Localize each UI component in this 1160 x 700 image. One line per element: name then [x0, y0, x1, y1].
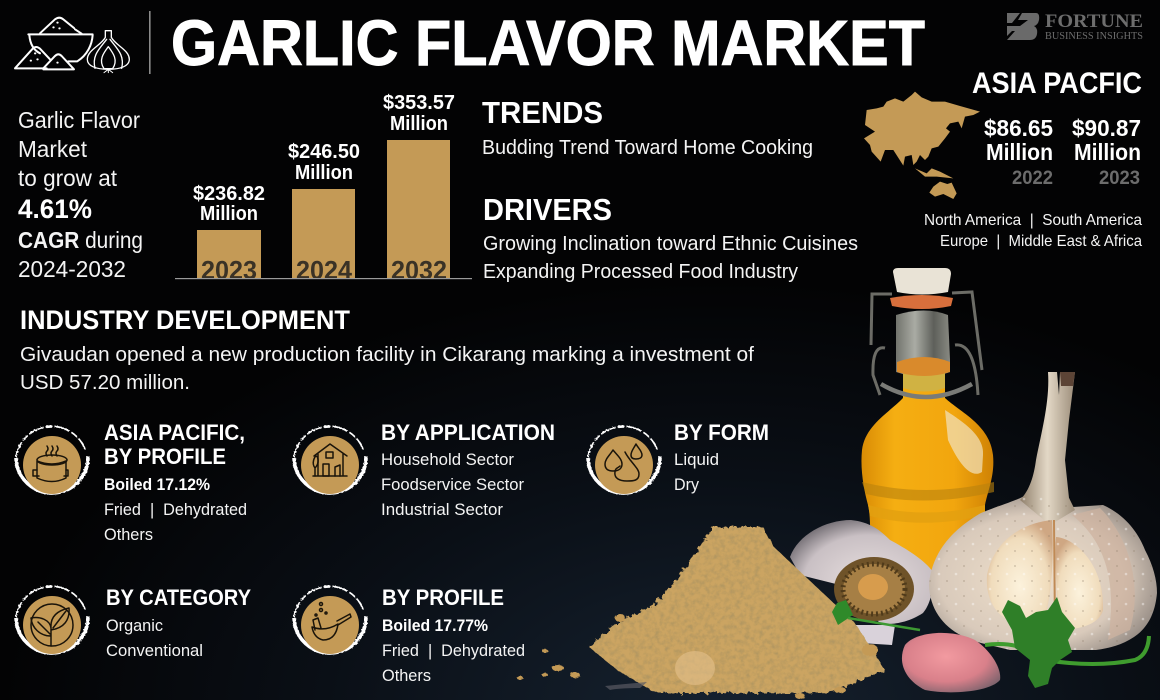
logo: Fortune Business Insights: FORTUNE: [1045, 11, 1143, 32]
other regions: Europe | Middle East & Africa: [940, 233, 1142, 250]
header divider: [149, 11, 151, 74]
regional values: [984, 115, 1141, 189]
drivers: Expanding Processed Food Industry: [483, 261, 798, 283]
icon: house: [313, 444, 347, 476]
text: CAGR summary: 4.61%: [18, 194, 92, 224]
segment: by application: Household Sector: [381, 450, 514, 469]
text: CAGR summary: CAGR during: [18, 227, 143, 253]
bar chart: market size: Million: [295, 162, 353, 184]
logo: Fortune Business Insights: BUSINESS INSIGHTS: [1045, 31, 1143, 42]
trends: [482, 95, 813, 159]
photo: cilantro: [832, 597, 1149, 688]
text: CAGR summary: 2024-2032: [18, 256, 126, 282]
text: CAGR summary: Garlic Flavor: [18, 107, 140, 133]
segment: by profile: [294, 585, 525, 685]
segment: by profile: BY PROFILE: [382, 585, 504, 610]
segment: by category: Organic: [106, 616, 163, 635]
industry development: INDUSTRY DEVELOPMENT: [20, 305, 350, 335]
segment: Asia Pacific by profile: Fried | Dehydrated: [104, 500, 247, 519]
bar chart: market size: Million: [390, 113, 448, 135]
segment: Asia Pacific by profile: ASIA PACIFIC,: [104, 420, 245, 445]
bar chart: market size: 2023: [201, 255, 257, 285]
segment: by category: [16, 585, 251, 660]
bar chart: market size: 2024: [296, 255, 353, 285]
segment: by category: BY CATEGORY: [106, 585, 251, 610]
segment: Asia Pacific by profile: [16, 420, 247, 544]
drivers: Growing Inclination toward Ethnic Cuisines: [483, 233, 858, 255]
segment: by application: [294, 420, 555, 519]
trends: TRENDS: [482, 95, 603, 130]
segment: Asia Pacific by profile: Boiled 17.12%: [104, 475, 210, 494]
segment: Asia Pacific by profile: Others: [104, 525, 153, 544]
segment: by form: [588, 420, 769, 494]
segment: by application: BY APPLICATION: [381, 420, 555, 445]
segment: by form: Dry: [674, 475, 699, 494]
other regions: [924, 212, 1142, 250]
segment: by application: Foodservice Sector: [381, 475, 524, 494]
bar chart: market size: 2032: [391, 255, 447, 285]
industry development: [20, 305, 754, 394]
bar chart: market size: [175, 92, 472, 285]
regional values: $86.65: [984, 115, 1053, 141]
segment: by form: Liquid: [674, 450, 719, 469]
industry development: Givaudan opened a new production facility in Cikarang marking a investment of: [20, 343, 754, 366]
icon: steaming pot: [33, 446, 68, 482]
bar chart: market size: Million: [200, 203, 258, 225]
logo: Fortune Business Insights: [1007, 11, 1143, 42]
title: GARLIC FLAVOR MARKET: [171, 7, 925, 79]
icon: leaves: [31, 604, 73, 646]
text: CAGR summary: Market: [18, 136, 88, 162]
industry development: USD 57.20 million.: [20, 371, 190, 394]
segment: by category: Conventional: [106, 641, 203, 660]
segment: Asia Pacific by profile: BY PROFILE: [104, 444, 226, 469]
map: Asia Pacific: [864, 92, 980, 199]
drivers: DRIVERS: [483, 192, 612, 227]
regional values: $90.87: [1072, 115, 1141, 141]
regional values: 2023: [1099, 168, 1140, 189]
text: CAGR summary: [18, 107, 143, 282]
regional values: Million: [1074, 139, 1141, 165]
photo: oil bottle: [861, 268, 994, 575]
icon: wok: [312, 602, 351, 640]
trends: Budding Trend Toward Home Cooking: [482, 137, 813, 159]
header icon: spice bowl and garlic: [15, 18, 129, 73]
photo: pink garlic clove: [902, 633, 1000, 692]
segment: by profile: Others: [382, 666, 431, 685]
photo: large garlic bulb: [929, 372, 1157, 650]
segment: by profile: Boiled 17.77%: [382, 616, 488, 635]
regional values: Million: [986, 139, 1053, 165]
text: CAGR summary: to grow at: [18, 165, 118, 191]
regional values: 2022: [1012, 168, 1053, 189]
bar chart: market size: $236.82: [193, 183, 265, 205]
icon: drops: [605, 444, 642, 481]
regional heading: ASIA PACFIC: [972, 67, 1142, 100]
segment: by profile: Fried | Dehydrated: [382, 641, 525, 660]
bar chart: market size: $353.57: [383, 92, 455, 114]
bar chart: market size: $246.50: [288, 141, 360, 163]
drivers: [483, 192, 858, 283]
segment: by form: BY FORM: [674, 420, 769, 445]
photo: small garlic bulb: [790, 520, 933, 645]
other regions: North America | South America: [924, 212, 1142, 229]
photo: garlic powder pile: [517, 527, 885, 699]
segment: by application: Industrial Sector: [381, 500, 503, 519]
